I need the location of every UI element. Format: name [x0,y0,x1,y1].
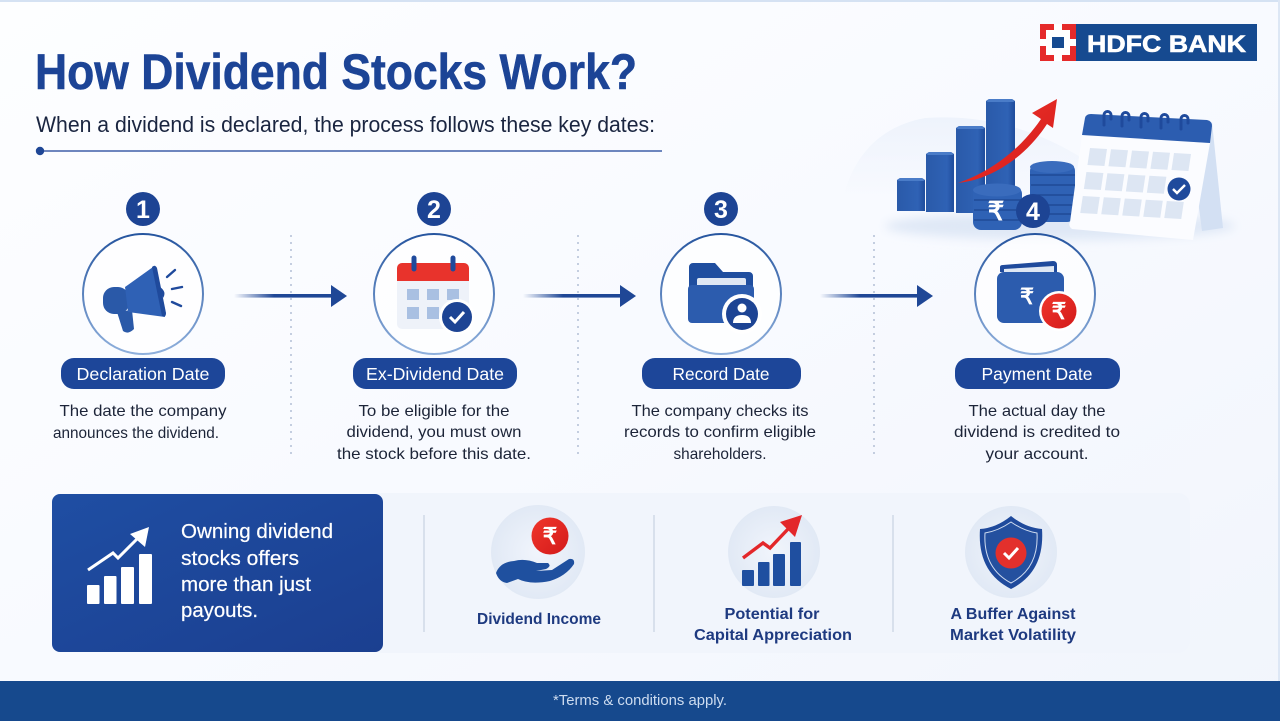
calendar illustration [1069,112,1223,240]
coin stacks [973,161,1075,230]
icon: wallet with rupee [975,234,1095,354]
label pill: Record Date [642,358,801,389]
description: announces the dividend. [53,425,219,442]
logo: HDFC Bank: HDFC BANK [1087,31,1247,58]
benefit: buffer against volatility [950,506,1076,644]
number badge 1 [126,192,160,226]
icon: megaphone [83,234,203,354]
description: records to confirm eligible [624,424,816,441]
label pill: Record Date: Record Date [672,364,770,384]
benefit: dividend income [477,505,601,628]
coin stacks: ₹ [988,196,1004,226]
bar chart illustration [897,99,1015,213]
description: dividend, you must own [346,424,522,441]
description: The company checks its [632,403,808,420]
label: A Buffer Against [950,606,1076,623]
description: dividend is credited to [954,424,1120,441]
callout text: stocks offers [181,548,299,570]
title: How Dividend Stocks Work? [35,44,637,100]
label pill: Ex-Dividend Date: Ex-Dividend Date [366,364,504,384]
icon: wallet with rupee: ₹ [1052,298,1067,324]
icon: rising bars [728,506,820,598]
footer bar: *Terms & conditions apply. [553,692,727,709]
step 1: declaration date [53,192,226,442]
label pill: Ex-Dividend Date [353,358,517,389]
label: Dividend Income [477,611,601,628]
icon: wallet with rupee: ₹ [1020,284,1034,309]
footer bar [0,681,1280,721]
panel: benefits [370,493,1190,653]
number badge 1: 1 [136,196,150,224]
number badge 2: 2 [427,196,441,224]
description: The date the company [60,403,226,420]
description: To be eligible for the [358,403,510,420]
description: The actual day the [968,403,1106,420]
callout text: more than just [181,574,311,596]
benefit: capital appreciation [694,506,852,644]
arrow 1 [234,285,347,307]
label pill: Payment Date: Payment Date [982,364,1092,384]
icon: folder with user [661,234,781,354]
icon: calendar with check [374,234,494,354]
label: Potential for [724,606,820,623]
step 3: record date [624,192,816,463]
number badge 4: 4 [1026,198,1040,226]
arrow 2 [523,285,636,307]
description: shareholders. [674,446,766,463]
illustration: growth bars, coins and calendar [897,99,1223,240]
arrow 3 [820,285,933,307]
subtitle rule [36,147,662,155]
red growth arrow [958,99,1057,183]
label: Market Volatility [950,627,1076,644]
label: Capital Appreciation [694,627,852,644]
label pill: Declaration Date: Declaration Date [76,364,210,384]
description: the stock before this date. [337,446,531,463]
callout: owning dividend stocks [52,494,383,652]
label pill: Declaration Date [61,358,225,389]
number badge 2 [417,192,451,226]
divider lines between steps [291,235,874,455]
label pill: Payment Date [955,358,1120,389]
step 2: ex-dividend date [337,192,531,463]
icon: shield with check [965,506,1057,598]
callout text: Owning dividend [181,521,333,543]
callout text: payouts. [181,600,258,622]
icon: hand holding rupee coin: ₹ [543,523,558,549]
logo: HDFC Bank [1040,24,1257,61]
number badge 4 [1016,194,1050,228]
subtitle: When a dividend is declared, the process follows these key dates: [36,112,655,137]
number badge 3 [704,192,738,226]
description: your account. [986,446,1088,463]
icon: white growth chart [87,527,152,604]
number badge 3: 3 [714,196,728,224]
step 4: payment date [954,194,1120,463]
